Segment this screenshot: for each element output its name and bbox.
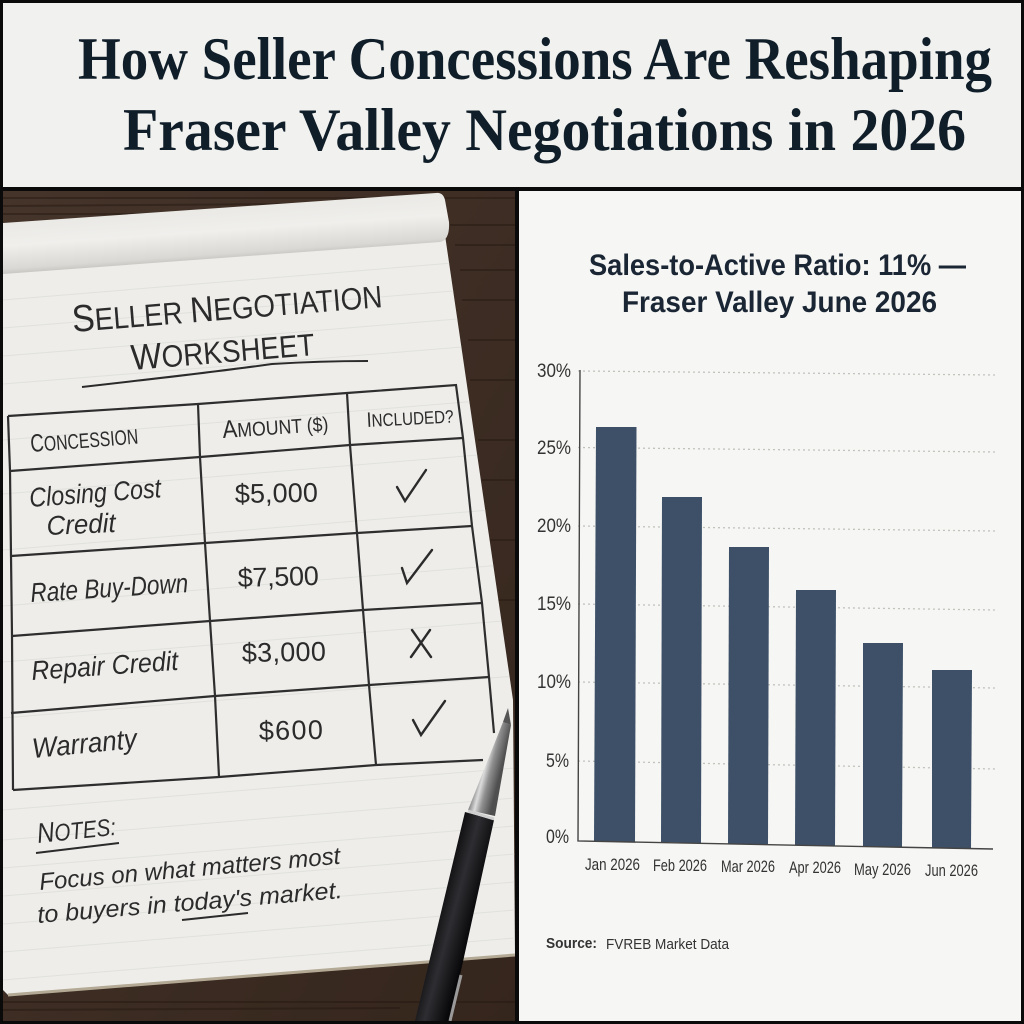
source note: Source:	[546, 935, 597, 952]
panel: bar chart	[519, 191, 1021, 1021]
panel: notepad worksheet photo	[3, 191, 515, 1021]
title: Fraser Valley Negotiations in 2026	[123, 97, 966, 163]
worksheet table: Rate Buy-Down	[29, 568, 189, 608]
y axis labels	[537, 361, 571, 848]
worksheet table: Credit	[46, 508, 118, 541]
notes text: to buyers in today's market.	[36, 877, 343, 929]
worksheet heading: SELLER NEGOTIATION	[70, 274, 384, 341]
worksheet table: Repair Credit	[30, 646, 180, 686]
y axis labels: 5%	[546, 751, 569, 772]
notes text	[38, 819, 340, 924]
y axis labels: 0%	[546, 827, 569, 848]
worksheet table: AMOUNT ($)	[221, 409, 329, 444]
bars	[594, 427, 972, 849]
y axis labels: 10%	[537, 672, 571, 693]
x axis labels: Jun 2026	[925, 862, 978, 880]
x axis labels: Apr 2026	[789, 859, 841, 877]
source note	[546, 935, 730, 953]
worksheet heading: WORKSHEET	[129, 322, 316, 378]
worksheet table: $3,000	[242, 637, 326, 668]
source note: FVREB Market Data	[606, 936, 730, 953]
y axis labels: 20%	[537, 516, 571, 537]
x axis labels: May 2026	[854, 861, 911, 879]
y axis labels: 25%	[537, 438, 571, 459]
notepad top roll	[3, 193, 449, 274]
worksheet table: CONCESSION	[29, 422, 139, 458]
y axis labels: 15%	[537, 594, 571, 615]
chart axes	[578, 370, 993, 849]
worksheet table: INCLUDED?	[366, 404, 454, 432]
x axis labels	[585, 856, 978, 880]
y axis labels: 30%	[537, 361, 571, 382]
worksheet table: $600	[259, 715, 323, 746]
worksheet table: $5,000	[235, 478, 318, 509]
notes text: Focus on what matters most	[38, 843, 343, 896]
panel: title header	[3, 3, 1021, 187]
worksheet table: Closing Cost	[28, 473, 163, 513]
icons: check and cross marks	[397, 470, 445, 735]
worksheet table: $7,500	[237, 561, 319, 593]
worksheet table: Warranty	[31, 723, 140, 764]
chart title: Fraser Valley June 2026	[622, 286, 937, 319]
x axis labels: Feb 2026	[653, 857, 707, 875]
x axis labels: Mar 2026	[721, 858, 775, 876]
chart gridlines	[578, 371, 995, 769]
chart title: Sales-to-Active Ratio: 11% —	[589, 249, 966, 282]
icon: pen	[415, 708, 511, 1021]
worksheet heading	[74, 286, 381, 370]
notepad sheet	[3, 235, 515, 995]
x axis labels: Jan 2026	[585, 856, 640, 874]
worksheet table	[8, 385, 494, 790]
notes text: NOTES:	[35, 810, 117, 849]
